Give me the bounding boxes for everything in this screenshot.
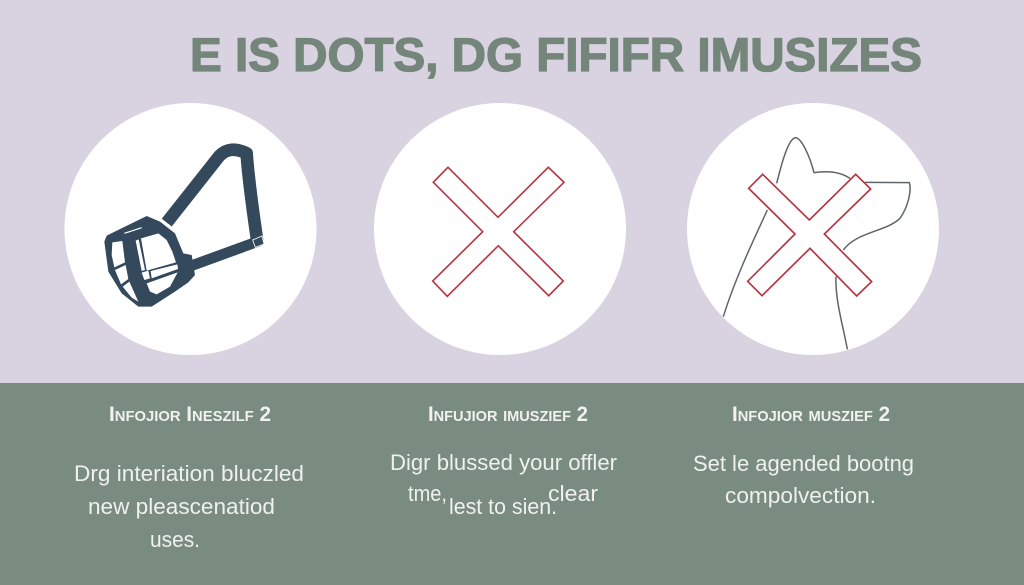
panel: muzzle circle	[64, 103, 316, 355]
heading: column 1: Infojior Ineszilf 2	[109, 403, 271, 426]
body: column 1	[74, 461, 304, 552]
title: E IS DOTS, DG FIFIFR IMUSIZES	[190, 28, 922, 81]
body: column 1: Drg interiation bluczled	[74, 461, 304, 486]
text block: column 2	[390, 403, 617, 519]
background	[0, 0, 1024, 383]
body: column 3: compolvection.	[725, 483, 876, 508]
body: column 2: tme,	[408, 481, 447, 506]
text block: column 3	[693, 403, 914, 508]
body: column 2: clear	[548, 481, 598, 506]
icon: red cross over dog	[748, 174, 872, 296]
body: column 2	[390, 450, 617, 519]
panel: dog profile circle	[687, 103, 939, 355]
body: column 1: new pleascenatiod	[88, 494, 275, 519]
body: column 2: lest to sien.	[449, 494, 557, 519]
icon: red cross	[433, 167, 564, 296]
text block: column 1	[74, 403, 304, 552]
body: column 2: Digr blussed your offler	[390, 450, 617, 475]
bottom green panel	[0, 383, 1024, 585]
icon: dog muzzle	[104, 150, 264, 307]
icon: dog outline	[723, 138, 910, 349]
panel: crossed circle	[374, 103, 626, 355]
body: column 3: Set le agended bootng	[693, 451, 914, 476]
body: column 1: uses.	[150, 527, 200, 552]
body: column 3	[693, 451, 914, 508]
heading: column 2: Infujior imuszief 2	[428, 403, 588, 426]
heading: column 3: Infojior muszief 2	[732, 403, 890, 426]
